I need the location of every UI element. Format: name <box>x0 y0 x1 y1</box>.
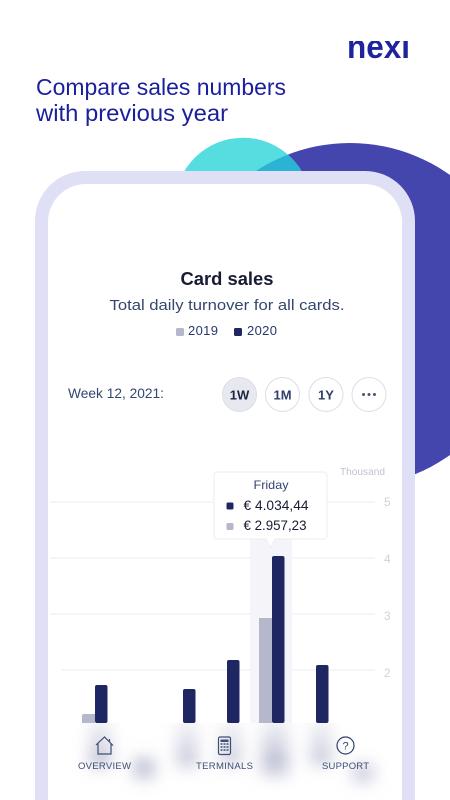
axis unit: Thousand <box>340 466 385 478</box>
chart <box>50 466 391 723</box>
decorative circles <box>175 138 450 487</box>
range buttons: 1M <box>273 388 292 402</box>
tooltip: Friday <box>254 478 288 492</box>
icon: calculator <box>218 737 230 754</box>
week label: Week 12, 2021: <box>68 386 164 401</box>
icon: help: ? <box>342 740 349 752</box>
navigation: overview: OVERVIEW <box>78 761 131 772</box>
phone frame <box>35 171 415 800</box>
range buttons: 1Y <box>318 388 334 402</box>
title: Compare sales numbers <box>36 74 286 100</box>
range buttons: 1W <box>230 388 250 402</box>
title <box>35 74 286 126</box>
logo: nexi: nexi <box>347 28 410 65</box>
tooltip: € 2.957,23 <box>244 518 306 533</box>
axis labels: 5 <box>384 495 391 509</box>
title: with previous year <box>35 100 228 126</box>
bars <box>82 556 328 723</box>
axis labels: 4 <box>384 552 391 566</box>
range buttons <box>222 378 386 412</box>
tooltip <box>214 472 327 548</box>
navigation: support <box>322 737 369 772</box>
legend: 2019 <box>188 323 218 338</box>
highlight band <box>250 535 292 723</box>
axis labels: 2 <box>384 666 391 680</box>
heading: card sales: Card sales <box>180 268 274 289</box>
navigation: terminals: TERMINALS <box>196 761 253 772</box>
navigation: overview <box>78 737 131 772</box>
legend <box>176 323 277 338</box>
axis labels <box>384 495 391 680</box>
blurred bars under navigation <box>82 723 380 788</box>
tooltip: € 4.034,44 <box>244 498 309 513</box>
subheading: Total daily turnover for all cards. <box>110 297 344 314</box>
navigation: terminals <box>196 737 253 772</box>
navigation: support: SUPPORT <box>322 761 369 772</box>
icon: home <box>96 737 113 754</box>
legend: 2020 <box>247 323 277 338</box>
axis labels: 3 <box>384 609 391 623</box>
